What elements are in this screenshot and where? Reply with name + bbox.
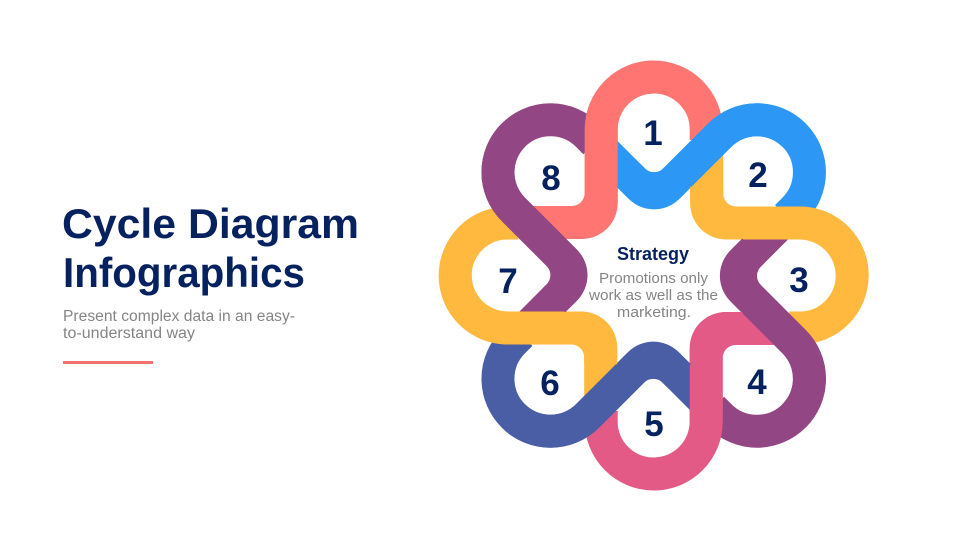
ribbon ends passing underneath: [426, 48, 882, 503]
loop 2: blue: 2: [748, 156, 768, 195]
accent rule: [63, 361, 153, 364]
subtitle: Present complex data in an easy-: [63, 308, 295, 325]
center text: strategy: [588, 244, 718, 321]
loop 8: purple: 8: [541, 159, 561, 198]
loop 7: yellow: [439, 262, 617, 364]
center text: strategy: marketing.: [617, 304, 691, 321]
loop 3: yellow: 3: [789, 261, 809, 300]
title: Cycle Diagram: [62, 200, 359, 247]
center text: strategy: Strategy: [617, 244, 689, 264]
loop 6: indigo: [502, 301, 691, 490]
loop 8: purple: [439, 123, 628, 312]
subtitle: to-understand way: [63, 325, 195, 342]
center text: strategy: Promotions only: [599, 270, 708, 287]
loop 4: purple: [680, 239, 868, 428]
loop 2: blue: [617, 61, 806, 250]
loop 1: coral: 1: [643, 114, 663, 153]
loop 4: purple: 4: [747, 363, 767, 402]
loop 6: indigo: 6: [540, 364, 560, 403]
loop 3: yellow: [690, 187, 869, 300]
loop 1: coral: [565, 60, 663, 239]
subtitle: [63, 308, 295, 342]
loop 7: yellow: 7: [498, 262, 518, 301]
loop 5: pink: [644, 312, 742, 490]
title: Infographics: [63, 249, 305, 296]
loop 5: pink: 5: [644, 405, 664, 444]
center text: strategy: work as well as the: [588, 287, 718, 304]
title: [62, 200, 359, 296]
